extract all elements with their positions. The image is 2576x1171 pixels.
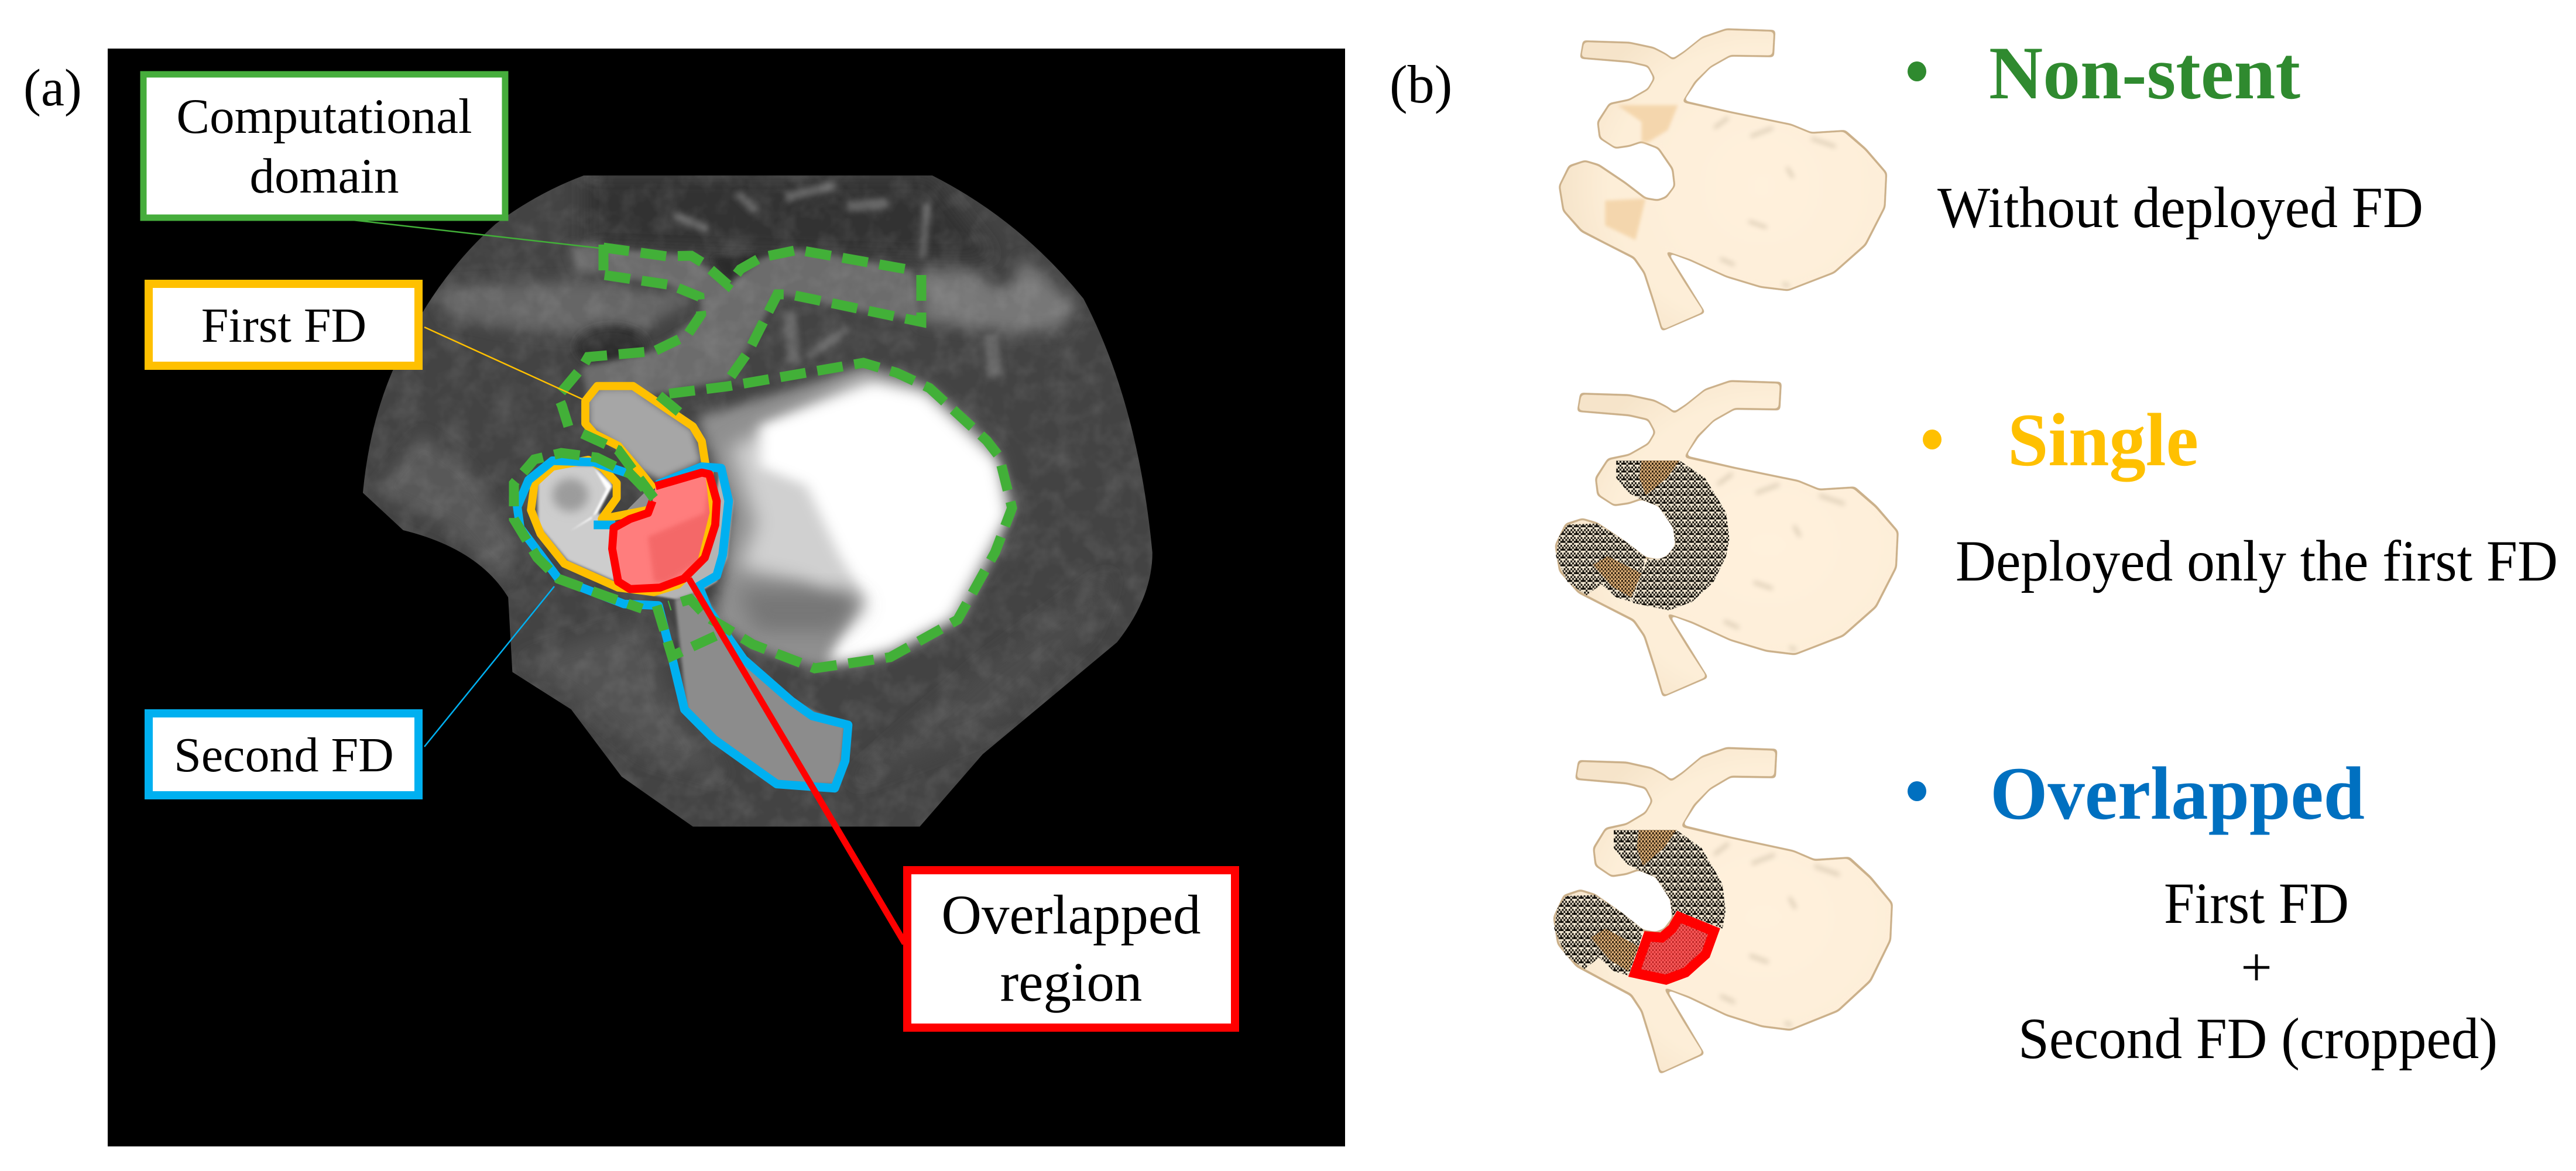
detail interior: vessel lumens xyxy=(537,389,845,785)
label box: overlapped region: region xyxy=(1000,951,1142,1013)
heading: Overlapped xyxy=(1990,751,2365,835)
label box: second FD xyxy=(149,713,419,795)
case: single xyxy=(1555,380,2558,697)
label box: overlapped region xyxy=(907,870,1235,1028)
black image background xyxy=(108,49,1345,1146)
darker shading inside overlap xyxy=(648,477,715,583)
bullet xyxy=(1908,61,1926,81)
leader line: second FD xyxy=(424,586,554,747)
label box: computational domain: domain xyxy=(250,149,399,204)
bullet xyxy=(1908,781,1926,801)
aneurysm model with first FD and cropped second FD xyxy=(1553,747,1893,1074)
first FD outline (yellow) xyxy=(531,386,714,592)
soft anatomy: vessels and tissue xyxy=(351,170,1171,831)
label box: first FD: First FD xyxy=(201,298,366,353)
overlapped region outline (red) xyxy=(612,473,716,589)
description line 2: Second FD (cropped) xyxy=(2018,1006,2498,1071)
leader line: overlapped region xyxy=(689,579,905,943)
panel label (a): (a) xyxy=(23,59,82,117)
label box: computational domain xyxy=(143,74,505,218)
leader line: computational domain xyxy=(353,220,605,249)
label box: first FD xyxy=(149,284,419,366)
panel (a): angiography image xyxy=(108,49,1345,1146)
label box: computational domain: Computational xyxy=(176,89,472,144)
label box: second FD: Second FD xyxy=(174,728,394,782)
leader line: first FD xyxy=(424,327,584,400)
case: non-stent xyxy=(1559,29,2423,331)
heading: Non-stent xyxy=(1989,31,2300,115)
computational domain outline (green dashed) xyxy=(514,242,1012,668)
panel label (b): (b) xyxy=(1390,54,1452,114)
label box: overlapped region: Overlapped xyxy=(941,884,1201,946)
overlapped stent patch (red) xyxy=(1635,917,1714,980)
aneurysm model with first FD xyxy=(1555,380,1899,697)
overlapped region fill (red) xyxy=(612,473,716,589)
case: overlapped xyxy=(1553,747,2498,1074)
description: Without deployed FD xyxy=(1937,175,2423,240)
aneurysm model without FD xyxy=(1559,29,1887,331)
heading: Single xyxy=(2008,398,2198,482)
bullet xyxy=(1923,430,1942,449)
bright aneurysm sac xyxy=(697,366,1012,668)
grey angiogram silhouette xyxy=(363,176,1152,827)
description: Deployed only the first FD xyxy=(1956,528,2558,593)
description line 1: First FD xyxy=(2164,871,2349,936)
plus sign: + xyxy=(2241,936,2272,998)
second FD outline (blue) xyxy=(517,461,848,788)
